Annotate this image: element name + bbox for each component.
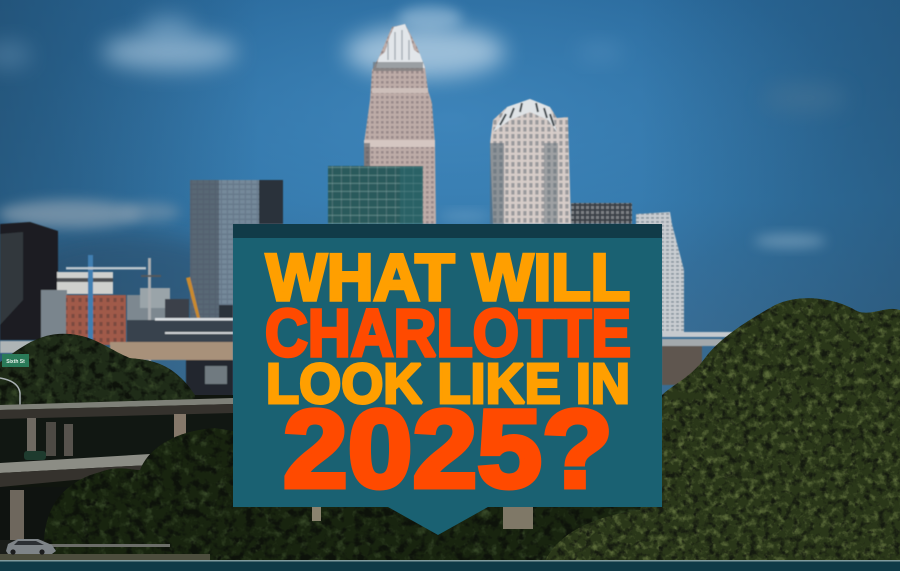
trees: foreground band bbox=[44, 428, 670, 561]
building: grey glass tower bbox=[190, 180, 283, 320]
title line: LOOK LIKE IN: LOOK LIKE IN bbox=[266, 352, 630, 416]
highway sign bbox=[2, 354, 29, 367]
clouds bbox=[0, 6, 847, 248]
panel top band bbox=[233, 224, 662, 238]
building: glass block bbox=[328, 166, 423, 224]
trees: right mass bbox=[545, 298, 900, 561]
highway: lower overpass bbox=[0, 451, 150, 540]
ground shadow under trees and roads bbox=[0, 395, 900, 561]
skyline buildings bbox=[0, 24, 752, 396]
road and car bbox=[0, 539, 210, 561]
building: crane and mid-rise cluster bbox=[41, 255, 200, 370]
panel pointer and body bbox=[233, 224, 662, 535]
building: low dark block bbox=[571, 203, 632, 224]
building: pale columns behind trees bbox=[312, 507, 533, 529]
title line: CHARLOTTE: CHARLOTTE bbox=[265, 296, 631, 371]
highway: upper overpass bbox=[0, 398, 233, 470]
building: right tower bbox=[636, 212, 684, 332]
highway sign: Sixth St bbox=[6, 359, 25, 365]
building: Hearst tower bbox=[490, 99, 571, 224]
bottom strip bbox=[0, 560, 900, 571]
title line: 2025?: 2025? bbox=[283, 388, 613, 511]
street lamp bbox=[0, 378, 20, 472]
title panel bbox=[233, 224, 662, 535]
building: black tower bbox=[0, 222, 58, 340]
title line: WHAT WILL: WHAT WILL bbox=[266, 240, 630, 314]
trees: left mid ground bbox=[0, 334, 195, 410]
building: Bank of America tower bbox=[364, 24, 436, 224]
building: arena and low blocks bbox=[0, 318, 752, 396]
